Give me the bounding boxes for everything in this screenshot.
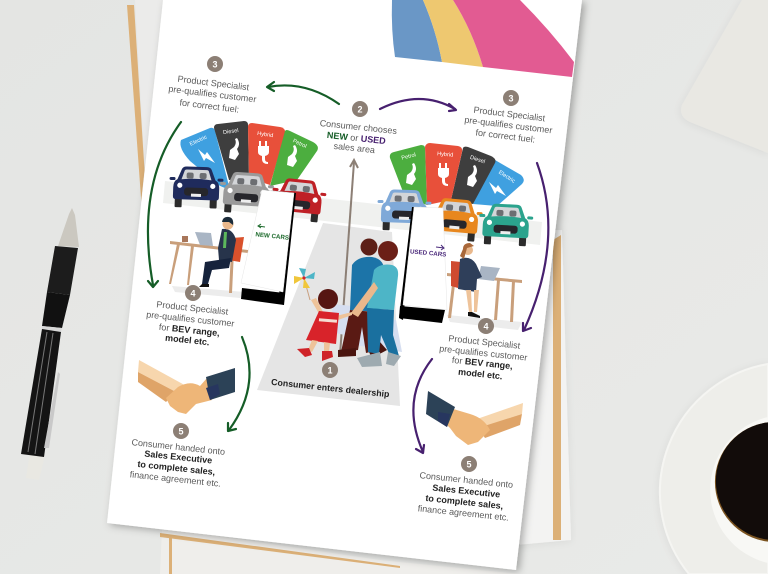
step 1: consumer enters dealership: Consumer enters dealership xyxy=(271,377,391,399)
step 5: left text: Consumer handed onto xyxy=(131,437,226,457)
arrow: left step 3 to 4 xyxy=(148,122,181,287)
step 2: consumer chooses xyxy=(319,101,398,155)
notebook corner xyxy=(681,0,768,153)
man xyxy=(338,238,387,358)
card: hybrid: Hybrid xyxy=(437,151,453,159)
stacked papers xyxy=(112,0,571,574)
step 3: left text: 3 xyxy=(212,60,218,70)
step 5: right text: 5 xyxy=(466,460,472,470)
step 4: left text: for BEV range, xyxy=(158,322,220,338)
coffee cup and saucer xyxy=(660,364,768,574)
car: silver xyxy=(218,171,275,215)
step 4: left text xyxy=(146,285,235,347)
card: electric: Electric xyxy=(497,170,516,185)
step 5: right text: Consumer handed onto xyxy=(419,470,514,490)
step 2: consumer chooses: Consumer chooses xyxy=(319,118,398,136)
car: red xyxy=(270,177,328,223)
step 1: consumer enters dealership xyxy=(271,362,391,399)
step 3: right text: for correct fuel: xyxy=(475,127,536,145)
step 4: right text: model etc. xyxy=(458,367,503,381)
step 5: left text: finance agreement etc. xyxy=(129,469,221,489)
step 5: right text: finance agreement etc. xyxy=(417,503,509,523)
woman xyxy=(351,241,401,367)
family xyxy=(294,238,402,367)
pen xyxy=(21,208,79,480)
step 3: right text: 3 xyxy=(508,94,514,104)
step 5: right text: Sales Executive xyxy=(432,482,501,500)
step 5: right text xyxy=(417,456,514,523)
step 4: right text: for BEV range, xyxy=(451,355,513,371)
left specialist at desk xyxy=(169,217,248,298)
entrance floor xyxy=(257,223,400,406)
door panel: used cars xyxy=(399,207,447,323)
car: navy xyxy=(169,166,224,209)
step 4: right text: Product Specialist xyxy=(448,333,521,351)
step 4: right text: pre-qualifies customer xyxy=(439,343,528,363)
step 3: right text: pre-qualifies customer xyxy=(464,115,553,135)
used cars: fuel cards xyxy=(390,143,524,206)
showroom floor band xyxy=(163,181,542,245)
step 3: left text: Product Specialist xyxy=(177,74,250,92)
step 2: consumer chooses: 2 xyxy=(357,104,363,114)
step 2: consumer chooses: sales area xyxy=(333,141,375,155)
step 4: right text: 4 xyxy=(483,322,489,332)
card: petrol: Petrol xyxy=(401,152,417,162)
pinwheel xyxy=(294,268,315,300)
handshake: right xyxy=(426,391,523,445)
shopping bags xyxy=(330,304,402,352)
step 3: right text xyxy=(464,90,553,145)
arrow: forward up the aisle xyxy=(340,160,358,355)
new cars: vehicles xyxy=(169,166,328,223)
girl xyxy=(297,289,352,361)
card: petrol: Petrol xyxy=(292,138,307,150)
step 3: right text: Product Specialist xyxy=(473,105,546,123)
arrow: right step 3 to 4 xyxy=(523,163,548,331)
step 5: left text: to complete sales, xyxy=(137,459,216,477)
arrow: left step 4 to 5 xyxy=(228,337,250,431)
rainbow header xyxy=(392,0,574,77)
used cars: vehicles xyxy=(377,189,534,247)
sign: used cars: USED CARS xyxy=(410,248,447,259)
step 1: consumer enters dealership: 1 xyxy=(327,366,333,376)
step 4: left text: 4 xyxy=(190,288,196,298)
sign: new cars: NEW CARS xyxy=(255,231,289,242)
new cars: fuel cards xyxy=(180,121,318,190)
step 4: left text: model etc. xyxy=(165,333,210,347)
step 3: left text: pre-qualifies customer xyxy=(168,84,257,104)
card: electric: Electric xyxy=(189,134,208,148)
step 5: left text xyxy=(129,423,226,489)
step 4: left text: pre-qualifies customer xyxy=(146,309,235,329)
car: teal xyxy=(478,203,534,247)
car: light blue xyxy=(377,189,432,232)
arrow: to new cars specialist xyxy=(267,82,339,104)
door panel: new cars xyxy=(241,190,296,305)
step 3: left text xyxy=(168,56,257,115)
card: diesel: Diesel xyxy=(223,128,239,136)
arrow: to used cars specialist xyxy=(380,99,456,111)
step 5: left text: Sales Executive xyxy=(144,448,213,466)
card: diesel: Diesel xyxy=(469,155,486,165)
step 3: left text: for correct fuel: xyxy=(179,97,240,115)
step 4: left text: Product Specialist xyxy=(156,299,229,317)
step 5: left text: 5 xyxy=(178,426,184,436)
step 4: right text xyxy=(439,318,528,381)
arrow: right step 4 to 5 xyxy=(413,359,432,453)
car: orange xyxy=(426,197,484,242)
right specialist at desk xyxy=(447,243,522,330)
step 5: right text: to complete sales, xyxy=(425,493,504,511)
step 2: consumer chooses: NEW or USED xyxy=(326,130,387,146)
card: hybrid: Hybrid xyxy=(257,131,274,139)
handshake: left xyxy=(138,360,235,414)
paper sheet xyxy=(107,0,582,570)
